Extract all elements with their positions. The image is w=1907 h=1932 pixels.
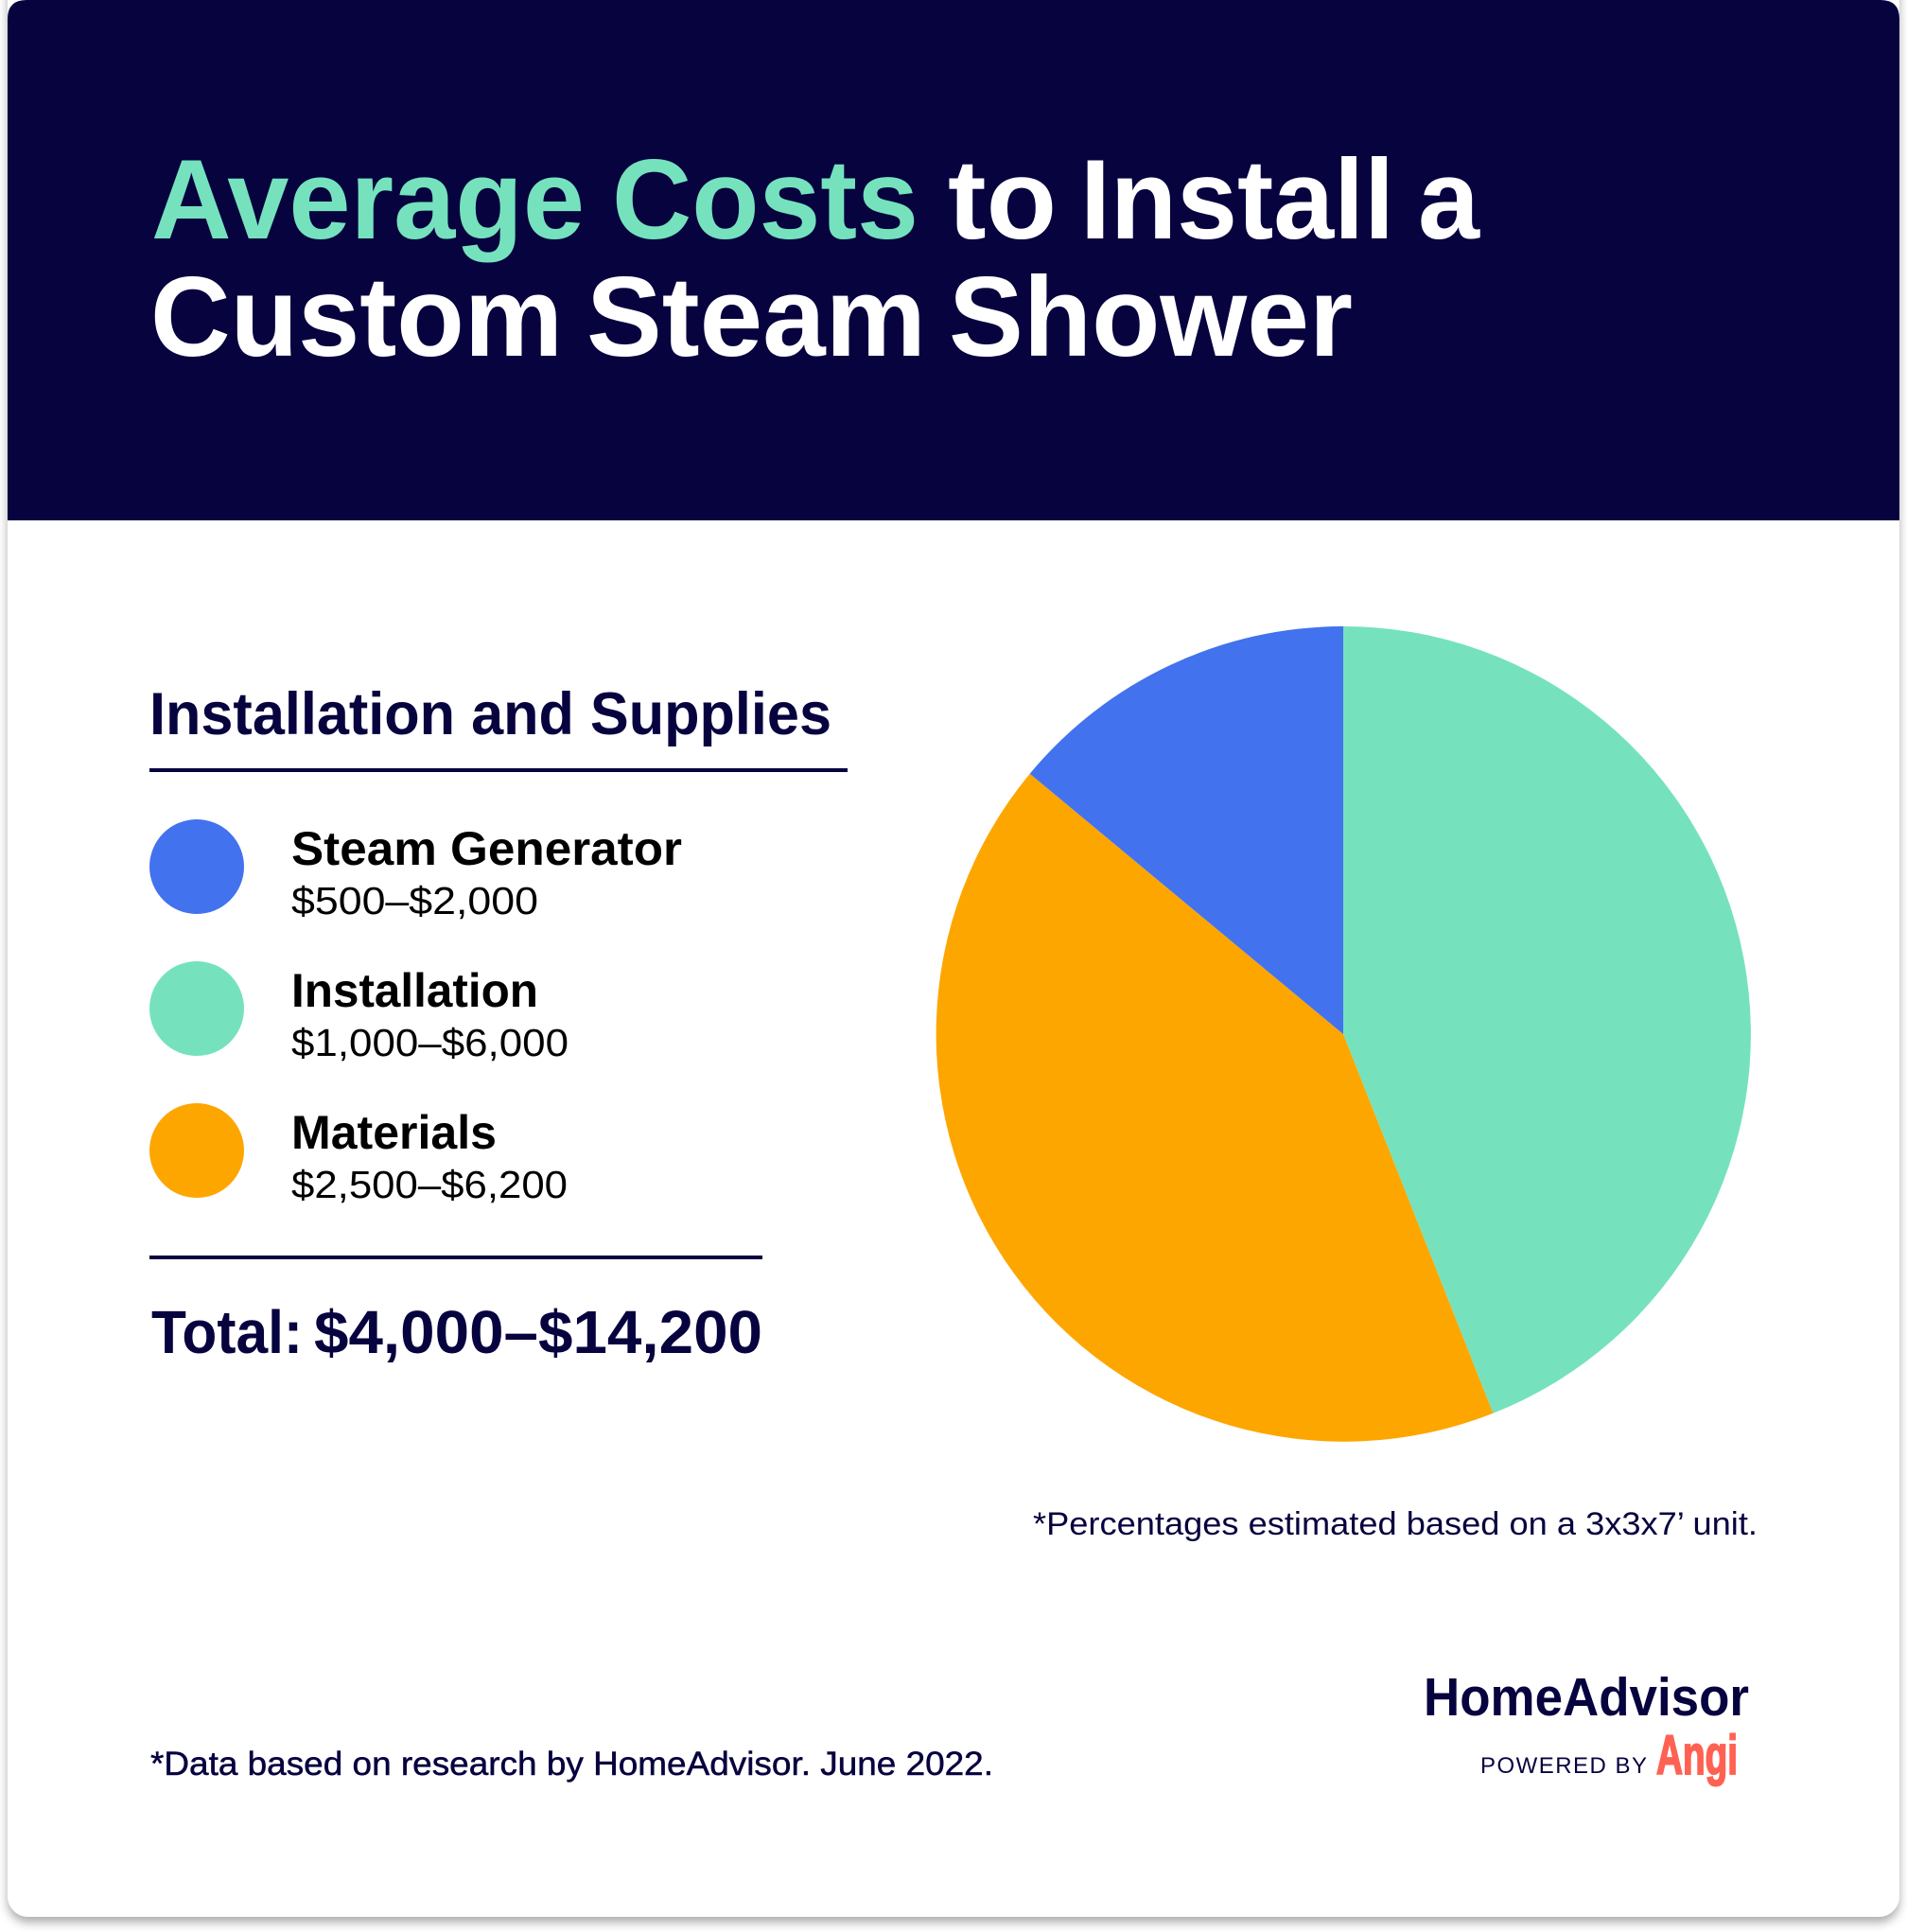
slice: materials — [936, 774, 1493, 1442]
note: data source: *Data based on research by HomeAdvisor. June 2022. — [150, 1746, 993, 1783]
value: installation cost: $1,000–$6,000 — [291, 1021, 569, 1064]
total: Total: — [151, 1298, 303, 1366]
pie chart — [936, 626, 1751, 1442]
slice: installation — [1343, 626, 1751, 1414]
title — [150, 136, 1480, 380]
legend item: materials — [149, 1103, 568, 1206]
logo: homeadvisor powered by angi — [1424, 1667, 1749, 1786]
legend item: installation — [149, 961, 569, 1064]
value: steam generator cost: $500–$2,000 — [291, 879, 538, 922]
angi wordmark: Angi — [1656, 1725, 1738, 1786]
heading: installation and supplies: Installation and Supplies — [149, 681, 831, 747]
legend item: steam generator — [149, 819, 682, 922]
total: $4,000–$14,200 — [314, 1298, 762, 1366]
title: Average — [151, 136, 585, 263]
value: materials cost: $2,500–$6,200 — [291, 1163, 568, 1206]
title: a — [1418, 136, 1480, 263]
title: to — [948, 136, 1057, 263]
label: installation: Installation — [291, 964, 538, 1017]
title: Shower — [949, 254, 1353, 380]
title: Install — [1080, 136, 1394, 263]
title: Steam — [586, 254, 926, 380]
divider rule bottom — [149, 1256, 762, 1259]
divider rule top — [149, 768, 848, 772]
logo wordmark: HomeAdvisor — [1424, 1667, 1749, 1728]
title: Costs — [612, 136, 919, 263]
title: Custom — [150, 254, 563, 380]
note: percentages: *Percentages estimated based on a 3x3x7’ unit. — [1033, 1506, 1758, 1542]
label: materials: Materials — [291, 1106, 497, 1159]
icon: blue circle — [149, 819, 244, 914]
icon: green circle — [149, 961, 244, 1056]
icon: orange circle — [149, 1103, 244, 1198]
powered by: POWERED BY — [1480, 1753, 1647, 1779]
slice: steam generator — [1030, 626, 1343, 1034]
panel: header band — [8, 0, 1899, 520]
label: steam generator: Steam Generator — [291, 822, 682, 875]
